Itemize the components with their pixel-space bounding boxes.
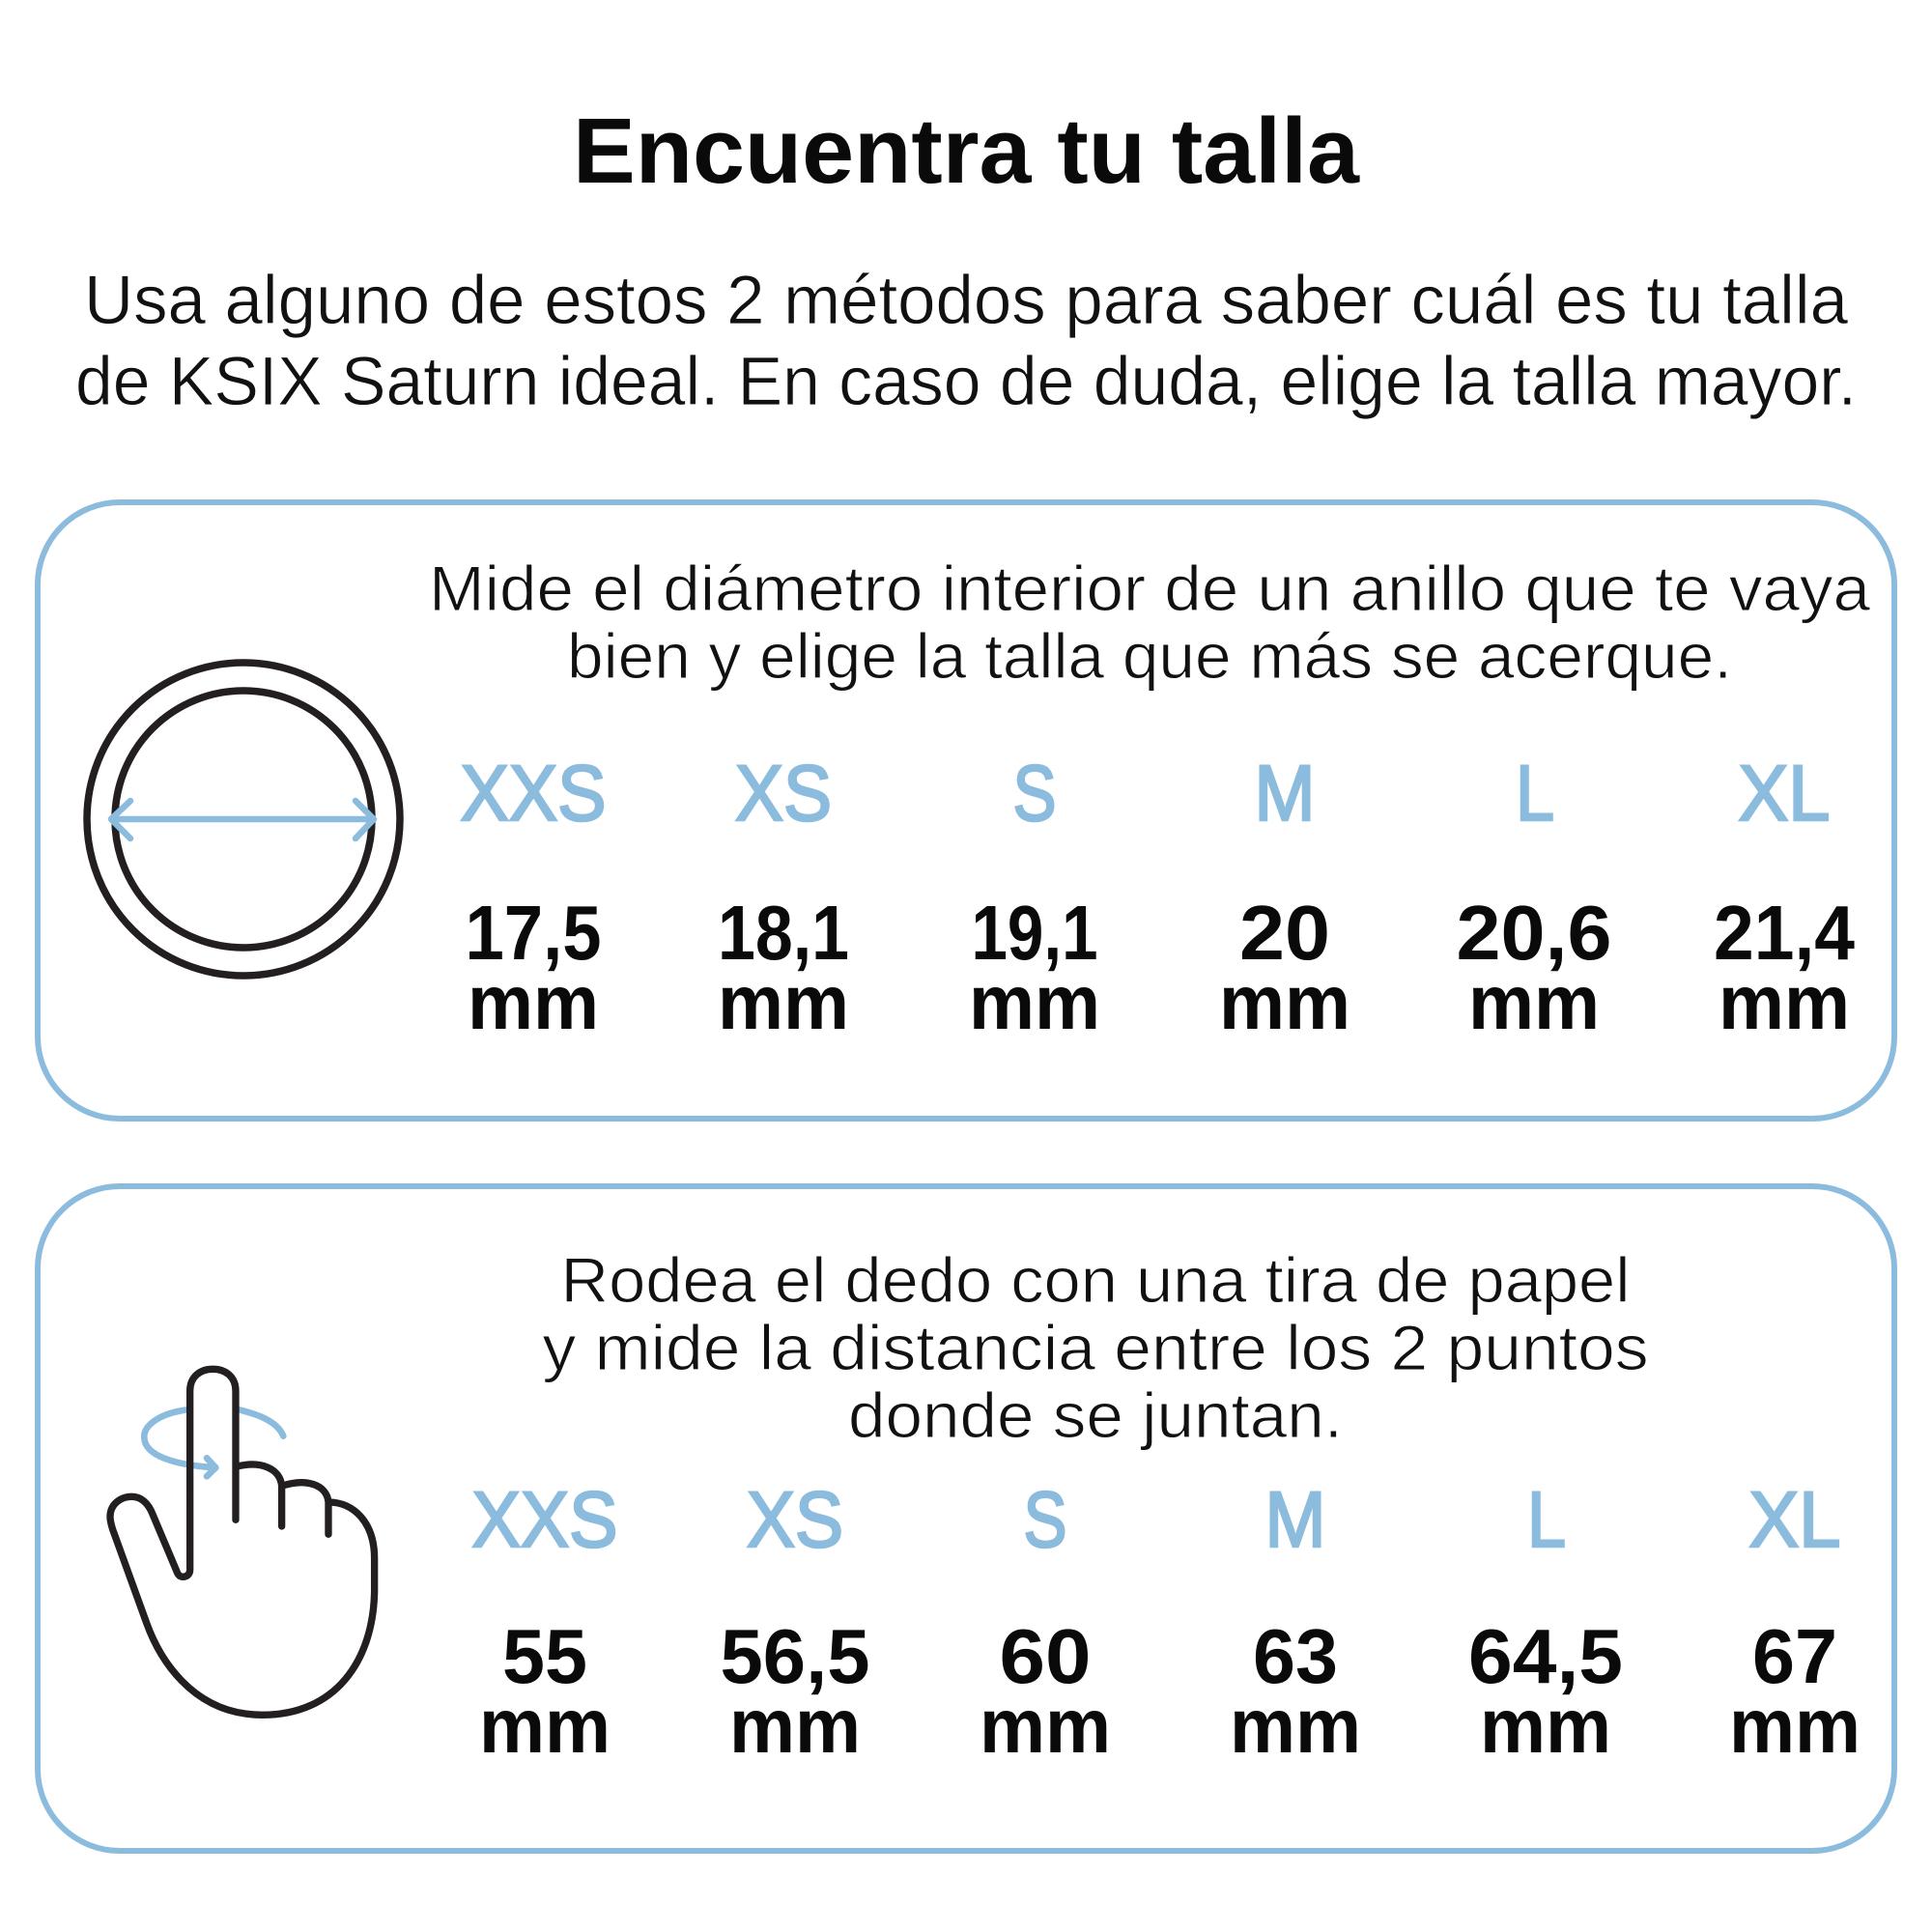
- circumference values: mm: [729, 1683, 861, 1769]
- size labels: XS: [735, 750, 832, 838]
- panel border: [38, 502, 1894, 1119]
- diameter values: 20: [1239, 890, 1330, 976]
- size labels: [460, 750, 1830, 838]
- diameter values: 19,1: [972, 890, 1097, 976]
- instructions: Rodea el dedo con una tira de papel: [560, 1244, 1631, 1316]
- circumference values: 64,5: [1468, 1613, 1623, 1699]
- size labels: XL: [1739, 750, 1830, 838]
- diameter values: 21,4: [1714, 890, 1855, 976]
- circumference values: mm: [479, 1683, 611, 1769]
- size labels: L: [1516, 750, 1554, 838]
- circumference values: mm: [980, 1683, 1111, 1769]
- diameter values: mm: [1219, 959, 1350, 1045]
- icon: hand with strip around finger: [110, 1369, 375, 1715]
- title: Encuentra tu talla: [573, 99, 1360, 203]
- circumference values: mm: [1729, 1683, 1861, 1769]
- size labels: M: [1254, 750, 1316, 838]
- size labels: L: [1527, 1476, 1566, 1564]
- instructions: y mide la distancia entre los 2 puntos: [543, 1312, 1648, 1383]
- circumference values: 56,5: [721, 1613, 869, 1699]
- circumference values: mm: [1480, 1683, 1611, 1769]
- diameter values: [466, 890, 1855, 1045]
- circumference values: 60: [999, 1613, 1092, 1699]
- intro text: Usa alguno de estos 2 métodos para saber cuál es tu talla: [84, 263, 1849, 339]
- diameter values: mm: [468, 959, 599, 1045]
- size labels: XXS: [460, 750, 607, 838]
- instructions: donde se juntan.: [848, 1379, 1343, 1451]
- diameter values: mm: [969, 959, 1100, 1045]
- size labels: M: [1265, 1476, 1325, 1564]
- size labels: XL: [1748, 1476, 1841, 1564]
- size labels: [471, 1476, 1841, 1564]
- diameter values: mm: [1719, 959, 1850, 1045]
- instructions: [543, 1244, 1648, 1451]
- circumference values: 55: [502, 1613, 587, 1699]
- size labels: S: [1024, 1476, 1066, 1564]
- diameter values: mm: [1468, 959, 1600, 1045]
- size labels: XS: [747, 1476, 843, 1564]
- panel border: [38, 1186, 1894, 1851]
- instructions: Mide el diámetro interior de un anillo que te vaya: [429, 553, 1870, 624]
- intro text: de KSIX Saturn ideal. En caso de duda, elige la talla mayor.: [75, 344, 1857, 420]
- intro text: [75, 263, 1857, 420]
- diameter values: mm: [718, 959, 849, 1045]
- panel: paper strip method: [38, 1186, 1894, 1851]
- instructions: bien y elige la talla que más se acerque.: [567, 620, 1732, 692]
- diameter values: 18,1: [718, 890, 849, 976]
- panel: ring diameter method: [38, 502, 1894, 1119]
- icon: ring with diameter arrow: [87, 663, 400, 976]
- diameter values: 20,6: [1457, 890, 1611, 976]
- circumference values: [479, 1613, 1861, 1769]
- size labels: S: [1012, 750, 1057, 838]
- diameter values: 17,5: [466, 890, 601, 976]
- circumference values: 67: [1752, 1613, 1837, 1699]
- instructions: [429, 553, 1870, 692]
- size labels: XXS: [471, 1476, 618, 1564]
- circumference values: mm: [1230, 1683, 1361, 1769]
- circumference values: 63: [1253, 1613, 1338, 1699]
